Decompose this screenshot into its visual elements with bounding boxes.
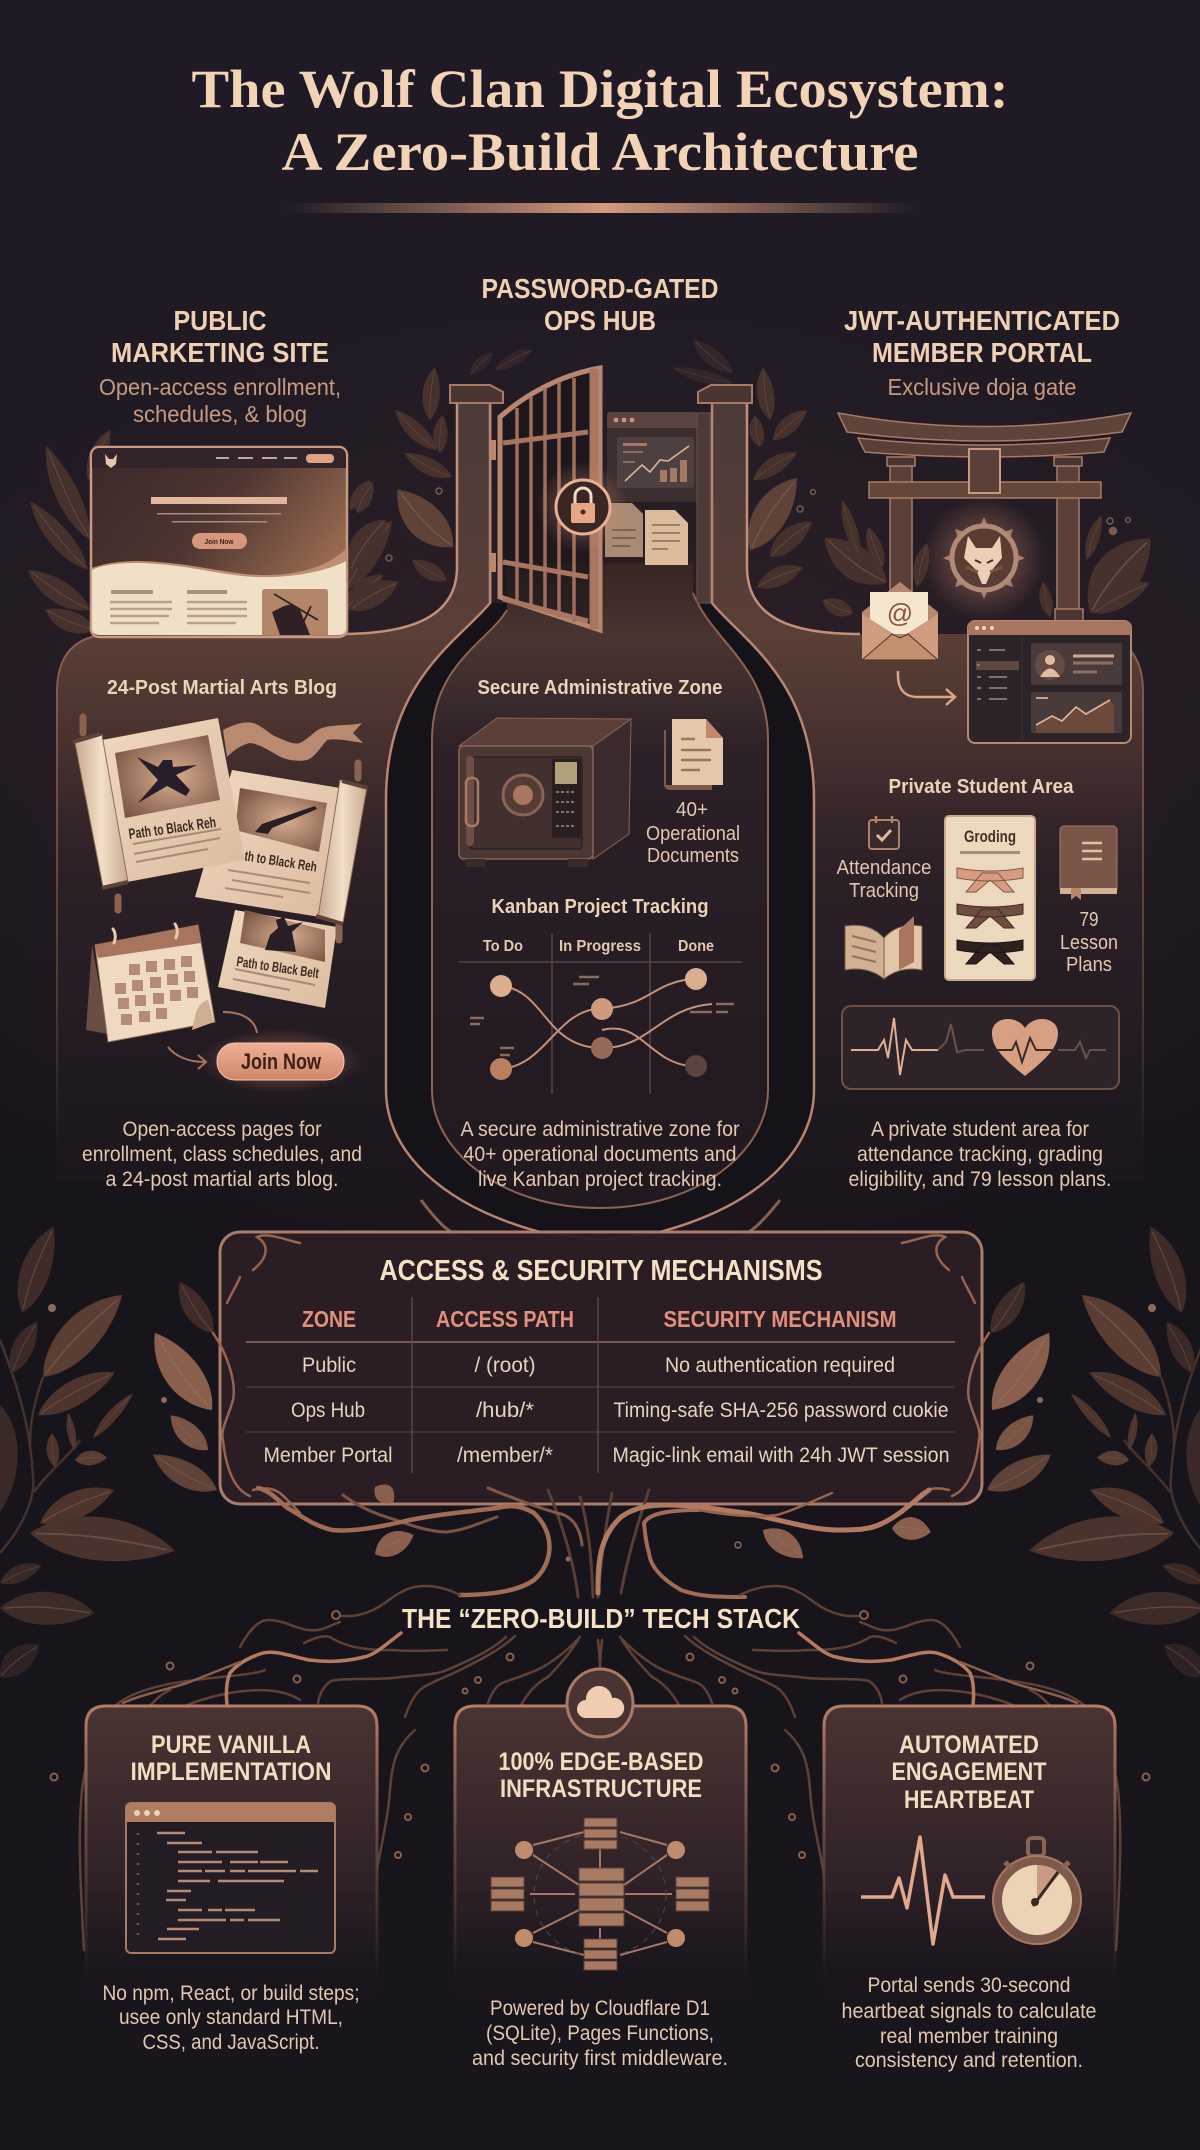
card text: consistency and retention. bbox=[855, 2049, 1083, 2072]
private student subheading: Private Student Area bbox=[888, 776, 1074, 798]
icon: safe bbox=[459, 718, 631, 867]
label: 79 lesson plans: Plans bbox=[1066, 954, 1112, 976]
icon: wolf emblem bbox=[922, 496, 1046, 620]
card heading bbox=[892, 1731, 1046, 1814]
icon: envelope: @ bbox=[887, 598, 913, 628]
button: join now: Join Now bbox=[241, 1049, 322, 1074]
title: A Zero-Build Architecture bbox=[282, 122, 919, 182]
card text: usee only standard HTML, bbox=[119, 2006, 343, 2029]
icon: calendar bbox=[86, 924, 215, 1042]
heading: password-gated ops hub bbox=[482, 273, 718, 336]
icon: scroll three: Path to Black Belt bbox=[236, 953, 320, 981]
card heading bbox=[498, 1748, 704, 1803]
arrow: calendar to button bbox=[168, 1012, 257, 1069]
card heading: HEARTBEAT bbox=[904, 1786, 1034, 1814]
heading: public marketing site: MARKETING SITE bbox=[111, 337, 329, 368]
stems to table bbox=[421, 1200, 780, 1240]
label: 40+ operational documents: Operational bbox=[646, 823, 740, 845]
label: attendance tracking bbox=[836, 857, 932, 902]
icon: envelope bbox=[862, 582, 938, 660]
title: The Wolf Clan Digital Ecosystem: bbox=[192, 59, 1008, 119]
heading: member portal: JWT-AUTHENTICATED bbox=[844, 305, 1120, 336]
label: 79 lesson plans bbox=[1060, 909, 1118, 976]
chart: kanban flow bbox=[459, 933, 742, 1094]
icon: scroll one bbox=[73, 717, 245, 910]
text: right panel description bbox=[848, 1118, 1112, 1191]
diagram: edge network bbox=[491, 1818, 709, 1970]
table rows: Timing-safe SHA-256 password cuokie bbox=[614, 1399, 948, 1422]
icon: gate post caps bbox=[450, 385, 752, 403]
headings: column titles bbox=[99, 273, 1120, 427]
card text: heartbeat signals to calculate bbox=[842, 2000, 1096, 2023]
icon: documents bbox=[605, 503, 688, 565]
text: left panel description: Open-access pages for bbox=[122, 1118, 322, 1141]
icon: belt light bbox=[957, 868, 1023, 892]
card text: Portal sends 30-second bbox=[868, 1974, 1070, 1997]
background leaves: right side bbox=[980, 1221, 1200, 1685]
label: 40+ operational documents bbox=[646, 799, 740, 867]
label: 40+ operational documents: Documents bbox=[647, 845, 739, 867]
text: left panel description bbox=[82, 1118, 362, 1191]
card text bbox=[102, 1982, 360, 2054]
chart: kanban flow: To Do bbox=[483, 938, 523, 955]
text: left panel description: a 24-post martial arts blog. bbox=[106, 1168, 338, 1191]
label: attendance tracking: Attendance bbox=[836, 857, 932, 879]
text: middle panel description: A secure administrative zone for bbox=[460, 1118, 740, 1141]
table heading: ACCESS & SECURITY MECHANISMS bbox=[380, 1255, 822, 1287]
blog subheading: 24-Post Martial Arts Blog bbox=[107, 677, 337, 699]
card heading: INFRASTRUCTURE bbox=[500, 1775, 702, 1803]
text: middle panel description: 40+ operational documents and bbox=[464, 1143, 736, 1166]
icon: dashboard behind gate bbox=[607, 412, 710, 603]
heading: zero-build tech stack: THE “ZERO-BUILD” TECH STACK bbox=[402, 1603, 800, 1634]
tree trunk and branches bbox=[258, 1488, 929, 1597]
label: attendance tracking: Tracking bbox=[849, 880, 919, 902]
chart: kanban flow: In Progress bbox=[559, 938, 641, 955]
chart: kanban flow: Done bbox=[678, 938, 714, 955]
icon: member dashboard bbox=[968, 621, 1131, 743]
icon: scroll two bbox=[195, 763, 368, 940]
card heading: PURE VANILLA bbox=[151, 1731, 311, 1759]
card text bbox=[842, 1974, 1096, 2072]
button: join now bbox=[199, 1029, 363, 1093]
table rows: Public bbox=[302, 1354, 356, 1377]
card text: real member training bbox=[880, 2025, 1058, 2048]
table rows: No authentication required bbox=[665, 1354, 895, 1377]
background leaves: left side bbox=[0, 1221, 224, 1685]
heading: member portal: MEMBER PORTAL bbox=[872, 337, 1092, 368]
icon: document bbox=[664, 719, 723, 790]
table rows: Member Portal bbox=[264, 1444, 392, 1467]
card: grading belts bbox=[945, 816, 1035, 980]
card: grading belts: Groding bbox=[964, 827, 1016, 846]
card text bbox=[472, 1997, 728, 2070]
card text: Powered by Cloudflare D1 bbox=[490, 1997, 710, 2020]
icon: belt black bbox=[957, 940, 1023, 964]
panel: public marketing site bbox=[57, 403, 600, 1180]
heading: public marketing site: PUBLIC bbox=[174, 305, 266, 336]
card heading: 100% EDGE-BASED bbox=[498, 1748, 704, 1776]
title bbox=[192, 59, 1008, 182]
icon: stopwatch bbox=[993, 1838, 1081, 1944]
table column headers: ZONE bbox=[302, 1306, 356, 1332]
table rows bbox=[264, 1354, 950, 1467]
heading: public marketing site bbox=[99, 305, 341, 427]
roots bbox=[50, 1586, 1150, 1950]
icon: lesson book bbox=[1060, 826, 1117, 900]
icon: scroll one: Path to Black Reh bbox=[128, 814, 217, 843]
table rows: Ops Hub bbox=[291, 1399, 365, 1422]
table column headers bbox=[302, 1306, 896, 1332]
icon: scroll three bbox=[218, 910, 337, 1008]
card heading bbox=[130, 1731, 332, 1786]
heading: public marketing site: Open-access enrollment, bbox=[99, 374, 341, 400]
card heading: AUTOMATED bbox=[899, 1731, 1039, 1759]
card text: and security first middleware. bbox=[472, 2047, 728, 2070]
text: right panel description: eligibility, and 79 lesson plans. bbox=[848, 1168, 1112, 1191]
icon: torii gate bbox=[838, 413, 1131, 622]
text: right panel description: attendance tracking, grading bbox=[857, 1143, 1103, 1166]
heading: password-gated ops hub: OPS HUB bbox=[544, 305, 656, 336]
icon: cloud badge bbox=[567, 1669, 633, 1737]
icon: gate door bbox=[493, 368, 600, 630]
label: 79 lesson plans: Lesson bbox=[1060, 932, 1118, 954]
icon: open book bbox=[845, 916, 922, 979]
card heading: IMPLEMENTATION bbox=[130, 1758, 332, 1786]
secure zone subheading: Secure Administrative Zone bbox=[478, 677, 722, 699]
card text: (SQLite), Pages Functions, bbox=[486, 2022, 714, 2045]
table: access and security mechanisms bbox=[213, 1232, 989, 1513]
table column headers: SECURITY MECHANISM bbox=[664, 1306, 896, 1332]
icon: padlock bbox=[537, 461, 629, 553]
panel edges bbox=[57, 403, 1143, 1160]
table rows: / (root) bbox=[474, 1354, 536, 1377]
table column headers: ACCESS PATH bbox=[436, 1306, 574, 1332]
table rows: /member/* bbox=[457, 1444, 553, 1467]
heading: member portal bbox=[844, 305, 1120, 400]
text: right panel description: A private student area for bbox=[871, 1118, 1089, 1141]
icon: scroll banner bbox=[223, 722, 363, 761]
icon: belt brown bbox=[957, 904, 1023, 928]
text: middle panel description bbox=[460, 1118, 740, 1191]
card: pure vanilla implementation bbox=[86, 1706, 377, 2054]
card text: CSS, and JavaScript. bbox=[142, 2031, 320, 2054]
panel: member portal bbox=[600, 403, 1143, 1180]
title rule bbox=[285, 203, 920, 213]
browser mockup bbox=[91, 447, 347, 637]
panel: ops hub bottle bbox=[386, 403, 814, 1240]
table rows: Magic-link email with 24h JWT session bbox=[612, 1444, 950, 1467]
heading: member portal: Exclusive doja gate bbox=[888, 374, 1076, 400]
text: middle panel description: live Kanban project tracking. bbox=[478, 1168, 722, 1191]
card: edge-based infrastructure bbox=[455, 1669, 746, 2070]
icon: attendance calendar bbox=[869, 816, 899, 849]
icon: pulse line bbox=[861, 1837, 985, 1944]
text: left panel description: enrollment, class schedules, and bbox=[82, 1143, 362, 1166]
label: 40+ operational documents: 40+ bbox=[676, 799, 708, 821]
heading: password-gated ops hub: PASSWORD-GATED bbox=[482, 273, 718, 304]
label: 79 lesson plans: 79 bbox=[1080, 909, 1098, 931]
leaves on tree bbox=[369, 1479, 932, 1566]
table rows: /hub/* bbox=[476, 1399, 534, 1422]
background leaves: top panels bbox=[21, 334, 1166, 641]
heading: public marketing site: schedules, & blog bbox=[133, 401, 307, 427]
card heading: ENGAGEMENT bbox=[892, 1758, 1046, 1786]
table corner vines bbox=[213, 1235, 989, 1513]
browser mockup: Join Now bbox=[204, 537, 234, 546]
card text: No npm, React, or build steps; bbox=[102, 1982, 360, 2005]
icon: code window bbox=[126, 1803, 335, 1953]
panel: heartbeat monitor bbox=[842, 1006, 1119, 1089]
kanban subheading: Kanban Project Tracking bbox=[492, 896, 708, 918]
icon: scroll two: th to Black Reh bbox=[243, 847, 318, 875]
arrow: envelope to dashboard bbox=[898, 671, 955, 705]
card: automated engagement heartbeat bbox=[824, 1706, 1115, 2072]
